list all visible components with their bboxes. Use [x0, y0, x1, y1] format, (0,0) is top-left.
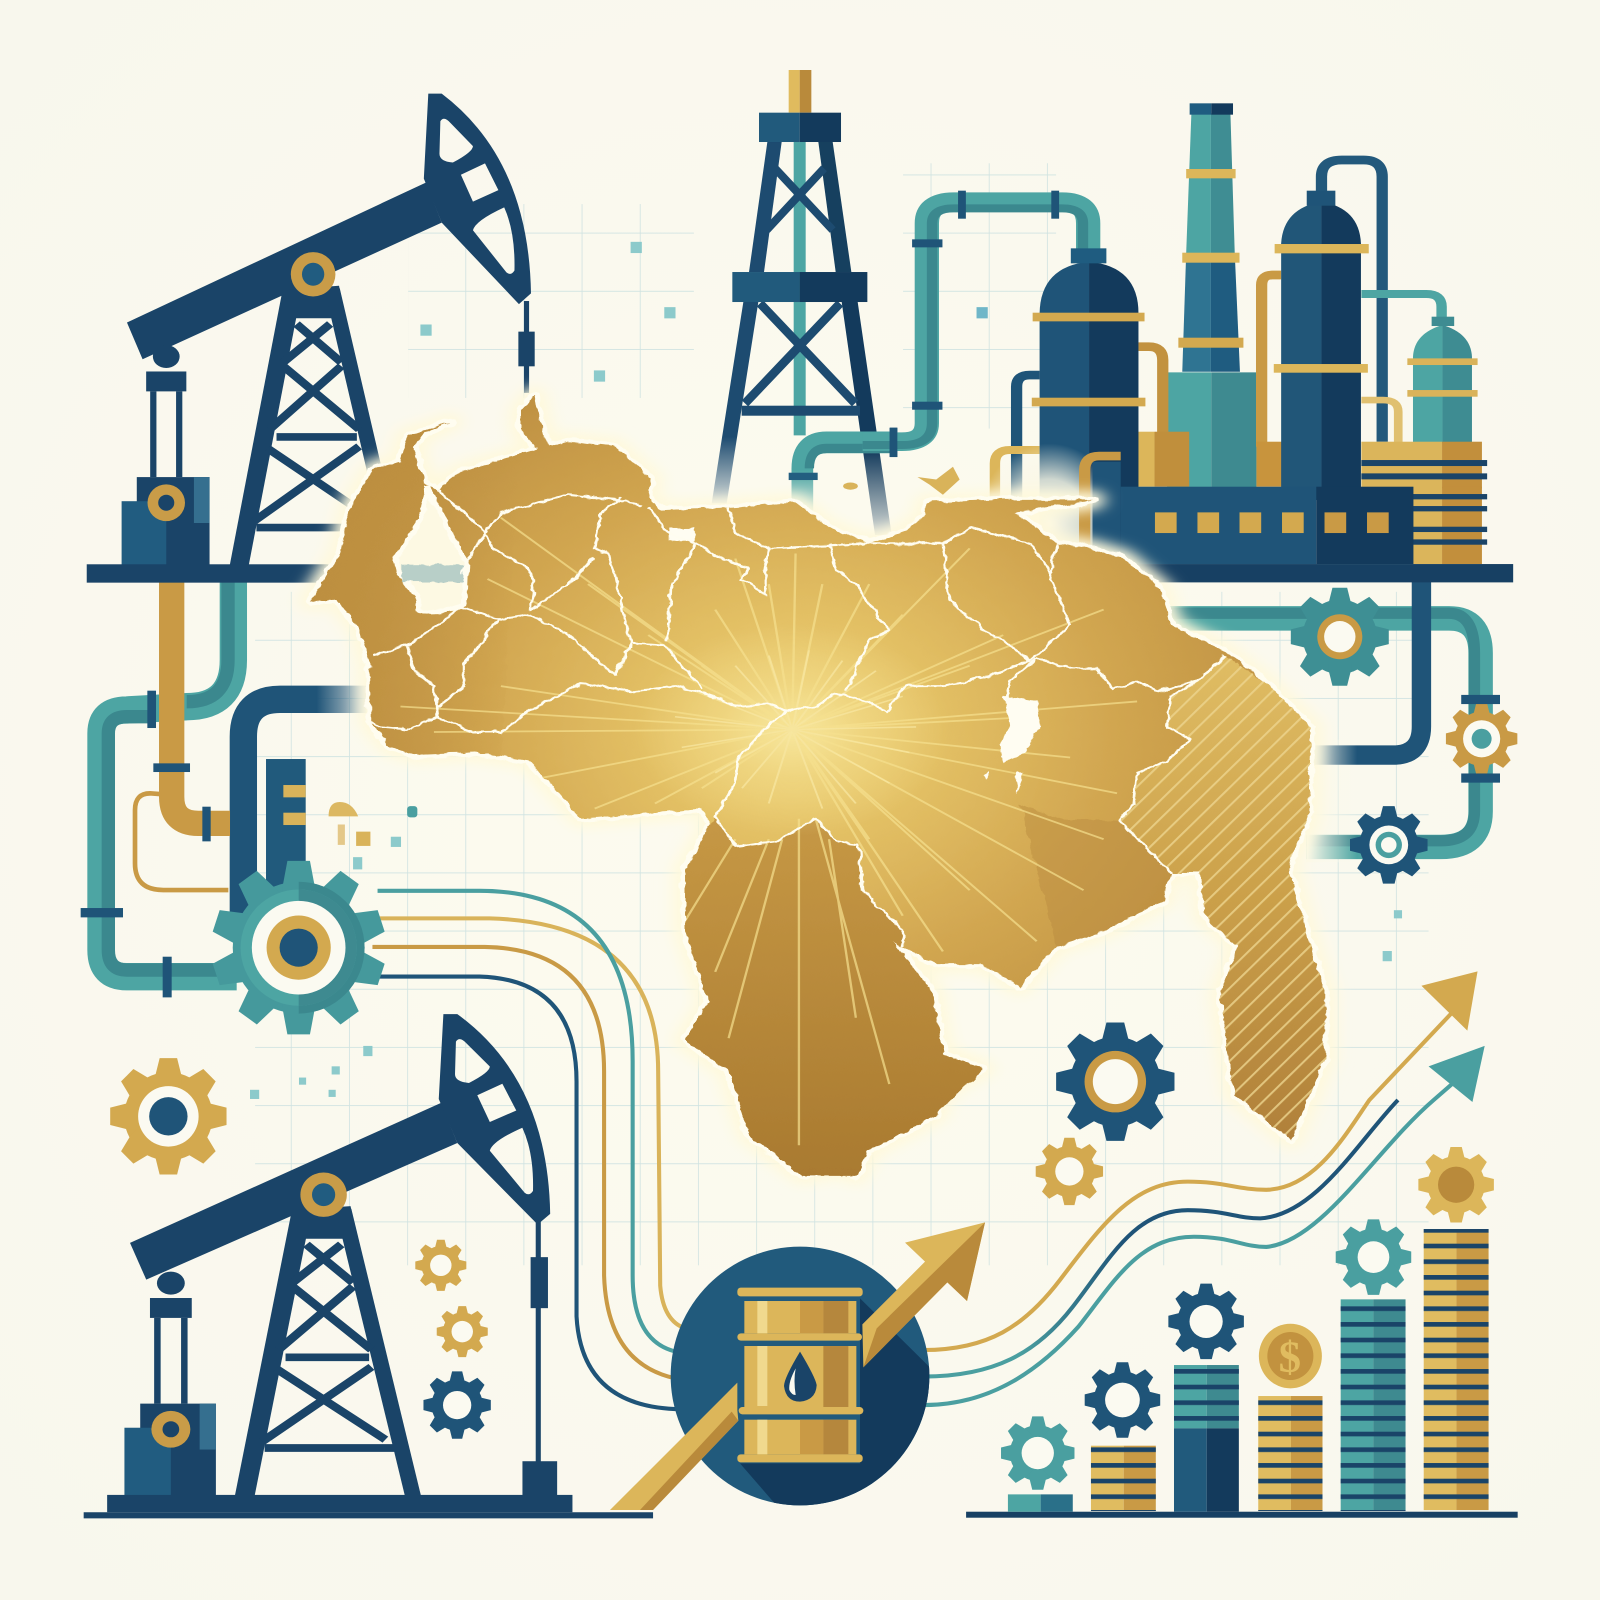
island: small cay	[843, 483, 858, 490]
oil drop	[784, 1352, 817, 1402]
gear: big teal	[211, 861, 386, 1034]
oil derrick: center top	[712, 70, 897, 535]
refinery platform	[1097, 564, 1513, 582]
arrowhead: teal trend	[1429, 1046, 1485, 1102]
pipes: right network	[1163, 571, 1481, 847]
vessel right	[1274, 191, 1369, 500]
coin dollar sign: $	[1279, 1331, 1301, 1381]
platform: bottom left	[84, 1495, 653, 1518]
pipe network: left	[81, 577, 367, 997]
navy circle	[671, 1247, 929, 1505]
connecting pipes	[995, 160, 1442, 500]
gear: gold left	[110, 1058, 227, 1174]
rising arrow upper	[862, 1222, 985, 1367]
pipe: teal loop shading	[1163, 613, 1474, 841]
gold storage block	[1361, 442, 1487, 564]
map features	[370, 485, 1224, 946]
thin gold loop	[135, 793, 228, 890]
refinery	[863, 103, 1513, 603]
lower legs and bracing	[712, 302, 892, 535]
gold stack 2	[1258, 1396, 1322, 1511]
arrowhead: gold trend	[1421, 971, 1478, 1031]
teal pipe	[101, 577, 237, 977]
circle shadow	[740, 1298, 930, 1506]
pipe fade near map	[1306, 740, 1357, 862]
incoming flow lines	[372, 891, 686, 1409]
working platform	[732, 272, 867, 302]
gear: navy bar chart 2	[1168, 1284, 1244, 1359]
gear: small gold	[1036, 1138, 1103, 1205]
flanges	[81, 691, 211, 997]
teal base	[1167, 372, 1256, 487]
gold stack 1	[1091, 1446, 1156, 1511]
gear: teal on right pipe	[1291, 588, 1389, 686]
gold pipe	[172, 577, 230, 823]
teal connector pipe	[802, 442, 897, 518]
island: Margarita	[917, 467, 960, 495]
platform: left	[87, 564, 383, 583]
navy pipe	[243, 699, 367, 923]
gold stack 3	[1424, 1229, 1489, 1510]
gear: small gold 1	[415, 1240, 466, 1291]
teal overhead pipe	[863, 202, 1088, 445]
vessel base fade	[978, 443, 1121, 603]
pumpjack: bottom left	[124, 1014, 557, 1507]
gear: navy bar chart 1	[1085, 1362, 1160, 1438]
flanges: right pipe	[1461, 695, 1500, 783]
gear: small gold 2	[437, 1306, 488, 1357]
upper legs and bracing	[749, 142, 851, 272]
control box	[266, 759, 306, 892]
gear: teal bar chart 2	[1336, 1219, 1411, 1295]
pipe: navy right	[1311, 571, 1421, 755]
teal base block	[1008, 1494, 1073, 1512]
vessel small teal	[1407, 317, 1478, 443]
blueprint grid	[255, 163, 1429, 1265]
gold feed pipe	[1085, 456, 1121, 563]
teal stack	[1341, 1299, 1406, 1511]
gear: navy on right pipe	[1350, 806, 1428, 884]
gold tank	[1121, 432, 1282, 487]
connector flanges	[789, 428, 897, 480]
gear: teal bar chart 1	[1001, 1416, 1074, 1490]
oil barrel badge	[610, 1222, 985, 1510]
map glow	[310, 395, 1325, 1176]
vessel left	[1032, 248, 1145, 563]
gold mast	[789, 70, 811, 113]
small data squares	[250, 242, 1402, 1099]
baseline	[966, 1512, 1518, 1518]
gear: navy centre right	[1056, 1022, 1174, 1141]
gear: gold on right pipe	[1446, 703, 1517, 774]
gear: small navy	[423, 1371, 491, 1439]
chart: rising stacks	[966, 1229, 1518, 1518]
gear: gold top of chart	[1418, 1147, 1494, 1222]
sun rays	[400, 518, 1137, 1145]
central teal column	[794, 142, 806, 435]
coin	[1259, 1324, 1322, 1388]
navy and teal stack	[1174, 1365, 1239, 1512]
refinery building	[1092, 462, 1413, 565]
teal pipe shading	[108, 577, 228, 970]
outgoing growth lines	[923, 1005, 1459, 1405]
pipe: teal loop right	[1163, 618, 1481, 847]
rising arrow lower	[610, 1383, 738, 1510]
Essequibo hatching	[1120, 658, 1326, 1135]
map of Venezuela	[307, 395, 1345, 1176]
pumpjack: top left	[122, 94, 535, 580]
crown block	[759, 113, 841, 142]
barrel	[737, 1288, 863, 1462]
map base	[307, 395, 1325, 1176]
overhead pipe flanges	[890, 191, 1059, 457]
chimney	[1178, 103, 1243, 372]
